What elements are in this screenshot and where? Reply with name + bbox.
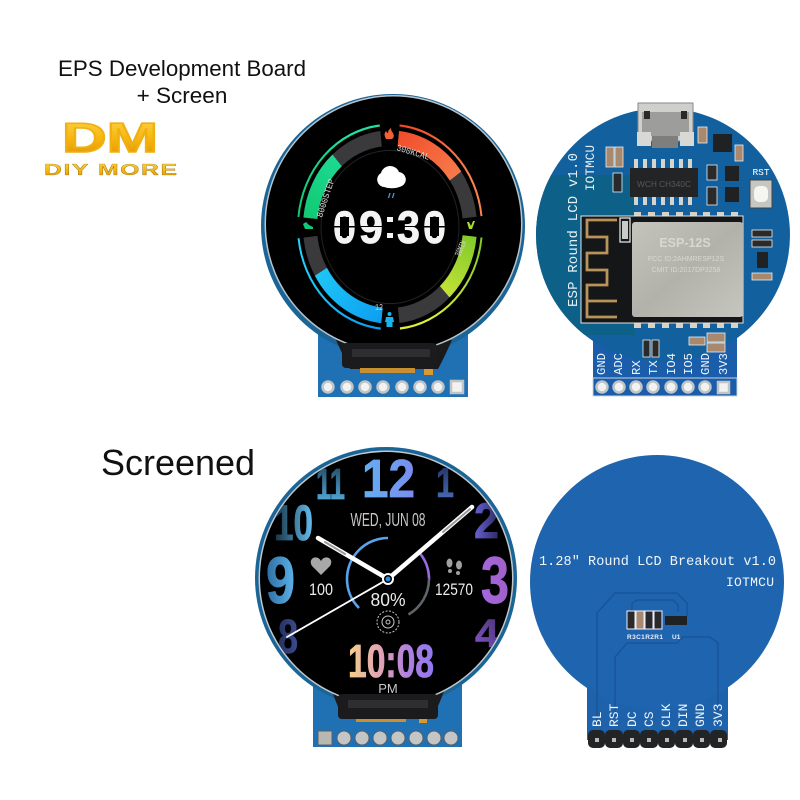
heading: Screened: Screened: [101, 442, 255, 483]
hour numerals: 4: [475, 612, 500, 656]
solder pads: [322, 381, 463, 393]
labels: ring values: 30MIN: [454, 240, 469, 258]
pin labels: RX: [630, 360, 644, 375]
pin labels: 3V3: [711, 704, 726, 727]
pin labels: CLK: [659, 703, 674, 727]
round display: [264, 95, 522, 369]
pin labels: IO5: [682, 353, 696, 375]
pin labels: ADC: [612, 353, 626, 375]
board name text: IOTMCU: [584, 145, 598, 191]
pcb outline: [530, 455, 784, 740]
ring: steps: [298, 125, 482, 329]
PCB traces: [597, 593, 718, 723]
labels: ring values: 12: [375, 303, 383, 313]
hour numerals: [267, 459, 508, 654]
pin labels: BL: [590, 711, 605, 727]
logo: DIY MORE: DIY MORE: [44, 161, 179, 179]
solder pads: [318, 731, 458, 745]
solder pads: [593, 378, 737, 396]
pcb outline: [535, 108, 790, 396]
icon: sun dial: [377, 611, 399, 633]
hour numerals: 10: [274, 495, 313, 551]
digital time: 10:08: [348, 635, 434, 687]
steps: [435, 558, 473, 599]
round display: [258, 450, 514, 719]
small components: [606, 127, 772, 357]
steps: 12570: [435, 580, 473, 599]
pcb outline: [255, 447, 517, 747]
pin labels: GND: [595, 353, 609, 375]
hour numerals: 9: [266, 543, 295, 617]
antenna gold trace: [587, 220, 617, 317]
IOTMCU label: IOTMCU: [726, 575, 774, 590]
transistors: [713, 134, 768, 268]
ring: people: [298, 125, 482, 329]
icon: rain cloud: [377, 166, 406, 198]
display ribbon cable: [338, 694, 438, 723]
labels: ring values: 8000STEP: [315, 178, 337, 219]
title: EPS Development Board + Screen: [58, 56, 306, 108]
logo: DIY MORE: DM: [62, 114, 158, 161]
reset button: [750, 180, 772, 208]
clock digits 09:30: 0: [333, 202, 356, 253]
micro USB connector: [637, 103, 694, 148]
clock digits 09:30: 9: [359, 202, 383, 253]
clock digits 09:30: 0: [423, 202, 446, 253]
ring: calories: [298, 125, 482, 329]
metal shield can: FCC ID:2AHMRESP12S: [648, 256, 724, 263]
hour numerals: 1: [436, 459, 454, 506]
clock digits 09:30: [333, 202, 446, 253]
hour numerals: 3: [481, 543, 509, 617]
pin labels: RST: [607, 703, 622, 727]
digit counters and segment gaps: [334, 217, 445, 236]
pin labels: DIN: [676, 704, 691, 727]
heart rate: 100: [309, 580, 333, 599]
icon: check: [467, 221, 475, 229]
pin labels: 3V3: [717, 353, 731, 375]
component group: R3C1R2R1: [627, 634, 663, 641]
icon: person: [385, 312, 394, 327]
date: WED, JUN 08: [350, 510, 426, 530]
battery gauge: [347, 538, 429, 620]
LED: [620, 218, 630, 242]
CH340 chip: WCH CH340C: [637, 180, 691, 189]
component group: U1: [672, 634, 681, 641]
panel: breakout board back: [530, 455, 784, 748]
hour numerals: 12: [362, 449, 415, 509]
pin labels: [595, 353, 731, 375]
pcb outline: [261, 94, 525, 397]
metal shield can: CMIT ID:2017DP3258: [652, 267, 720, 274]
board name text: [566, 145, 598, 307]
icon: flame: [384, 128, 394, 139]
pin labels: GND: [693, 703, 708, 727]
CH340 chip: [630, 159, 698, 205]
hour numerals: 8: [278, 611, 298, 664]
labels: ring values: [315, 143, 469, 313]
metal shield can: ESP-12S: [659, 236, 711, 250]
metal shield can: [632, 222, 743, 317]
panel: board front with fitness watch face: [261, 94, 525, 397]
pin labels: CS: [642, 711, 657, 727]
title text on PCB: 1.28" Round LCD Breakout v1.0: [539, 555, 776, 570]
label: RST: RST: [752, 167, 770, 178]
labels: ring values: 300KCAL: [395, 143, 431, 163]
logo: DIY MORE: [44, 114, 179, 179]
clock digits 09:30: 3: [397, 202, 420, 253]
activity rings: [298, 125, 482, 329]
ESP-12S module: [581, 212, 743, 328]
clock hands: [287, 507, 472, 637]
panel: board front with analog watch face: [255, 447, 517, 747]
panel: board back with ESP-12S: [535, 103, 790, 396]
display ribbon cable: [342, 343, 437, 375]
pin labels: TX: [647, 360, 661, 375]
board name text: ESP Round LCD v1.0: [566, 153, 582, 307]
title: EPS Development Board + Screen: EPS Development Board: [58, 56, 306, 81]
heart rate: [309, 557, 333, 599]
icon: shoe: [303, 222, 313, 229]
pin labels: [590, 703, 726, 727]
title: EPS Development Board + Screen: + Screen: [137, 83, 227, 108]
pin labels: DC: [625, 711, 640, 727]
battery percent: 80%: [370, 590, 406, 610]
pin header: [588, 730, 727, 748]
pin labels: IO4: [665, 353, 679, 375]
ring: minutes: [298, 125, 482, 329]
hour numerals: 2: [474, 493, 499, 549]
pin labels: GND: [699, 353, 713, 375]
hour numerals: 11: [316, 460, 345, 509]
component group: [627, 611, 687, 641]
label: PM: PM: [378, 681, 398, 696]
